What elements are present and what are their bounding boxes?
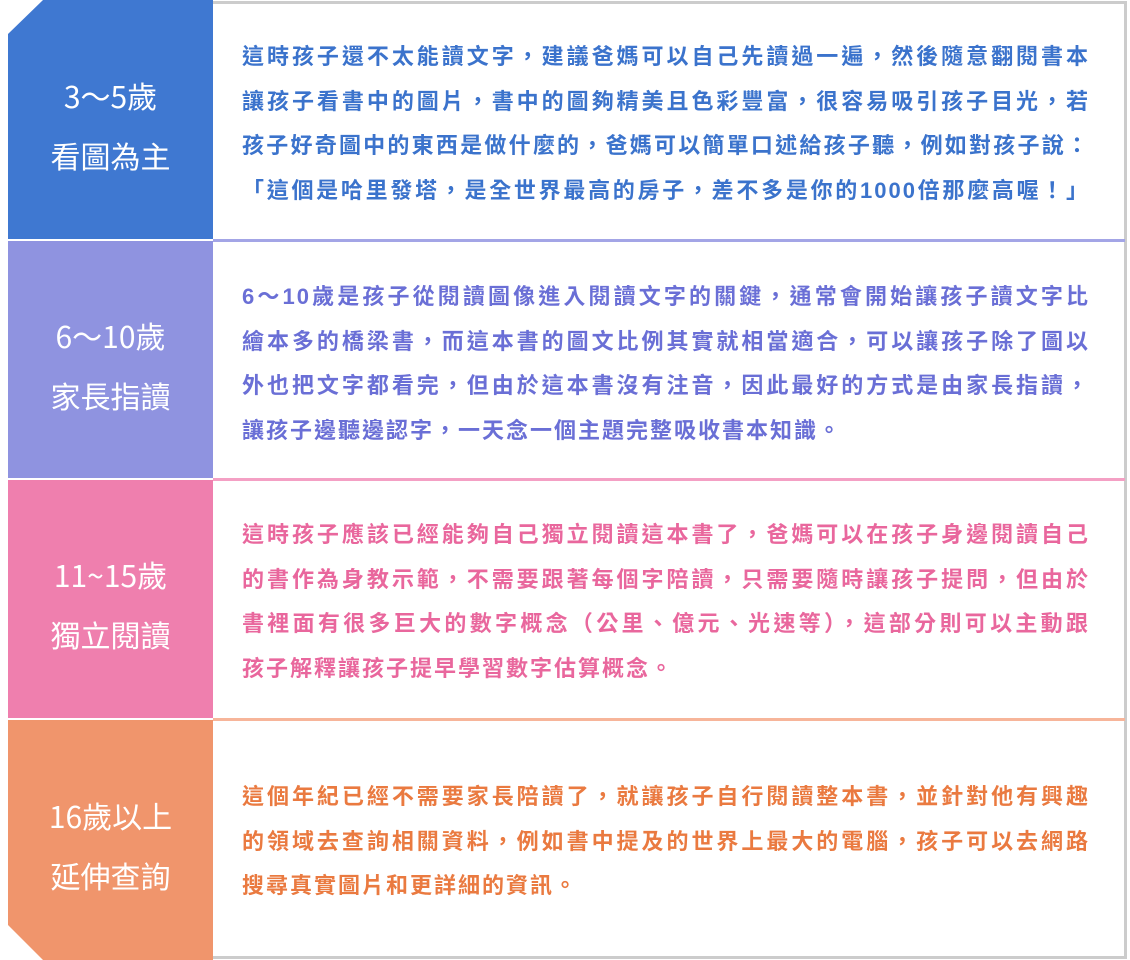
label: 11~15歲	[8, 480, 213, 718]
label: 11~15歲: 獨立閱讀	[50, 612, 170, 656]
text: row 3: 書裡面有很多巨大的數字概念（公里、億元、光速等），這部分則可以主動跟	[242, 611, 1090, 636]
label: 3~5歲: 看圖為主	[50, 132, 170, 176]
text: row 3: 孩子解釋讓孩子提早學習數字估算概念。	[242, 656, 674, 680]
text: row 4: 的領域去查詢相關資料，例如書中提及的世界上最大的電腦，孩子可以去網路	[242, 828, 1090, 854]
text: row 3: 的書作為身教示範，不需要跟著每個字陪讀，只需要隨時讓孩子提問，但由於	[242, 566, 1090, 592]
text: row 3: 這時孩子應該已經能夠自己獨立閱讀這本書了，爸媽可以在孩子身邊閱讀自己	[242, 522, 1090, 547]
label: 6~10歲	[8, 241, 213, 478]
label: 16歲以上	[8, 720, 213, 960]
text: row 4	[242, 784, 1090, 898]
label: 3~5歲	[8, 0, 213, 239]
label: 6~10歲: 家長指讀	[50, 372, 170, 416]
label: 11~15歲: 11~15歲	[54, 552, 167, 596]
label: 3~5歲: 3～5歲	[64, 72, 157, 116]
text: row 2: 繪本多的橋梁書，而這本書的圖文比例其實就相當適合，可以讓孩子除了圖以	[242, 328, 1090, 354]
label: 6~10歲: 6～10歲	[56, 312, 165, 356]
text: row 4: 搜尋真實圖片和更詳細的資訊。	[242, 873, 578, 898]
label: 16歲以上: 16歲以上	[49, 793, 172, 837]
text: row 2: 6～10歲是孩子從閱讀圖像進入閱讀文字的關鍵，通常會開始讓孩子讀文字比	[242, 284, 1090, 309]
text: row 3	[242, 522, 1090, 680]
text: row 1: 讓孩子看書中的圖片，書中的圖夠精美且色彩豐富，很容易吸引孩子目光，若	[242, 88, 1090, 114]
text: row 1: 這時孩子還不太能讀文字，建議爸媽可以自己先讀過一遍，然後隨意翻閱書本	[242, 44, 1090, 69]
text: row 1: 「這個是哈里發塔，是全世界最高的房子，差不多是你的1000倍那麼高喔！」	[242, 178, 1090, 202]
text: row 2: 讓孩子邊聽邊認字，一天念一個主題完整吸收書本知識。	[242, 418, 842, 442]
text: row 2: 外也把文字都看完，但由於這本書沒有注音，因此最好的方式是由家長指讀，	[242, 373, 1090, 398]
label: 16歲以上: 延伸查詢	[50, 853, 170, 897]
text: row 1: 孩子好奇圖中的東西是做什麼的，爸媽可以簡單口述給孩子聽，例如對孩子說：	[242, 133, 1090, 158]
text: row 2	[242, 284, 1090, 442]
text: row 4: 這個年紀已經不需要家長陪讀了，就讓孩子自行閱讀整本書，並針對他有興趣	[242, 784, 1090, 809]
text: row 1	[242, 44, 1090, 202]
frame borders	[213, 1, 1127, 4]
